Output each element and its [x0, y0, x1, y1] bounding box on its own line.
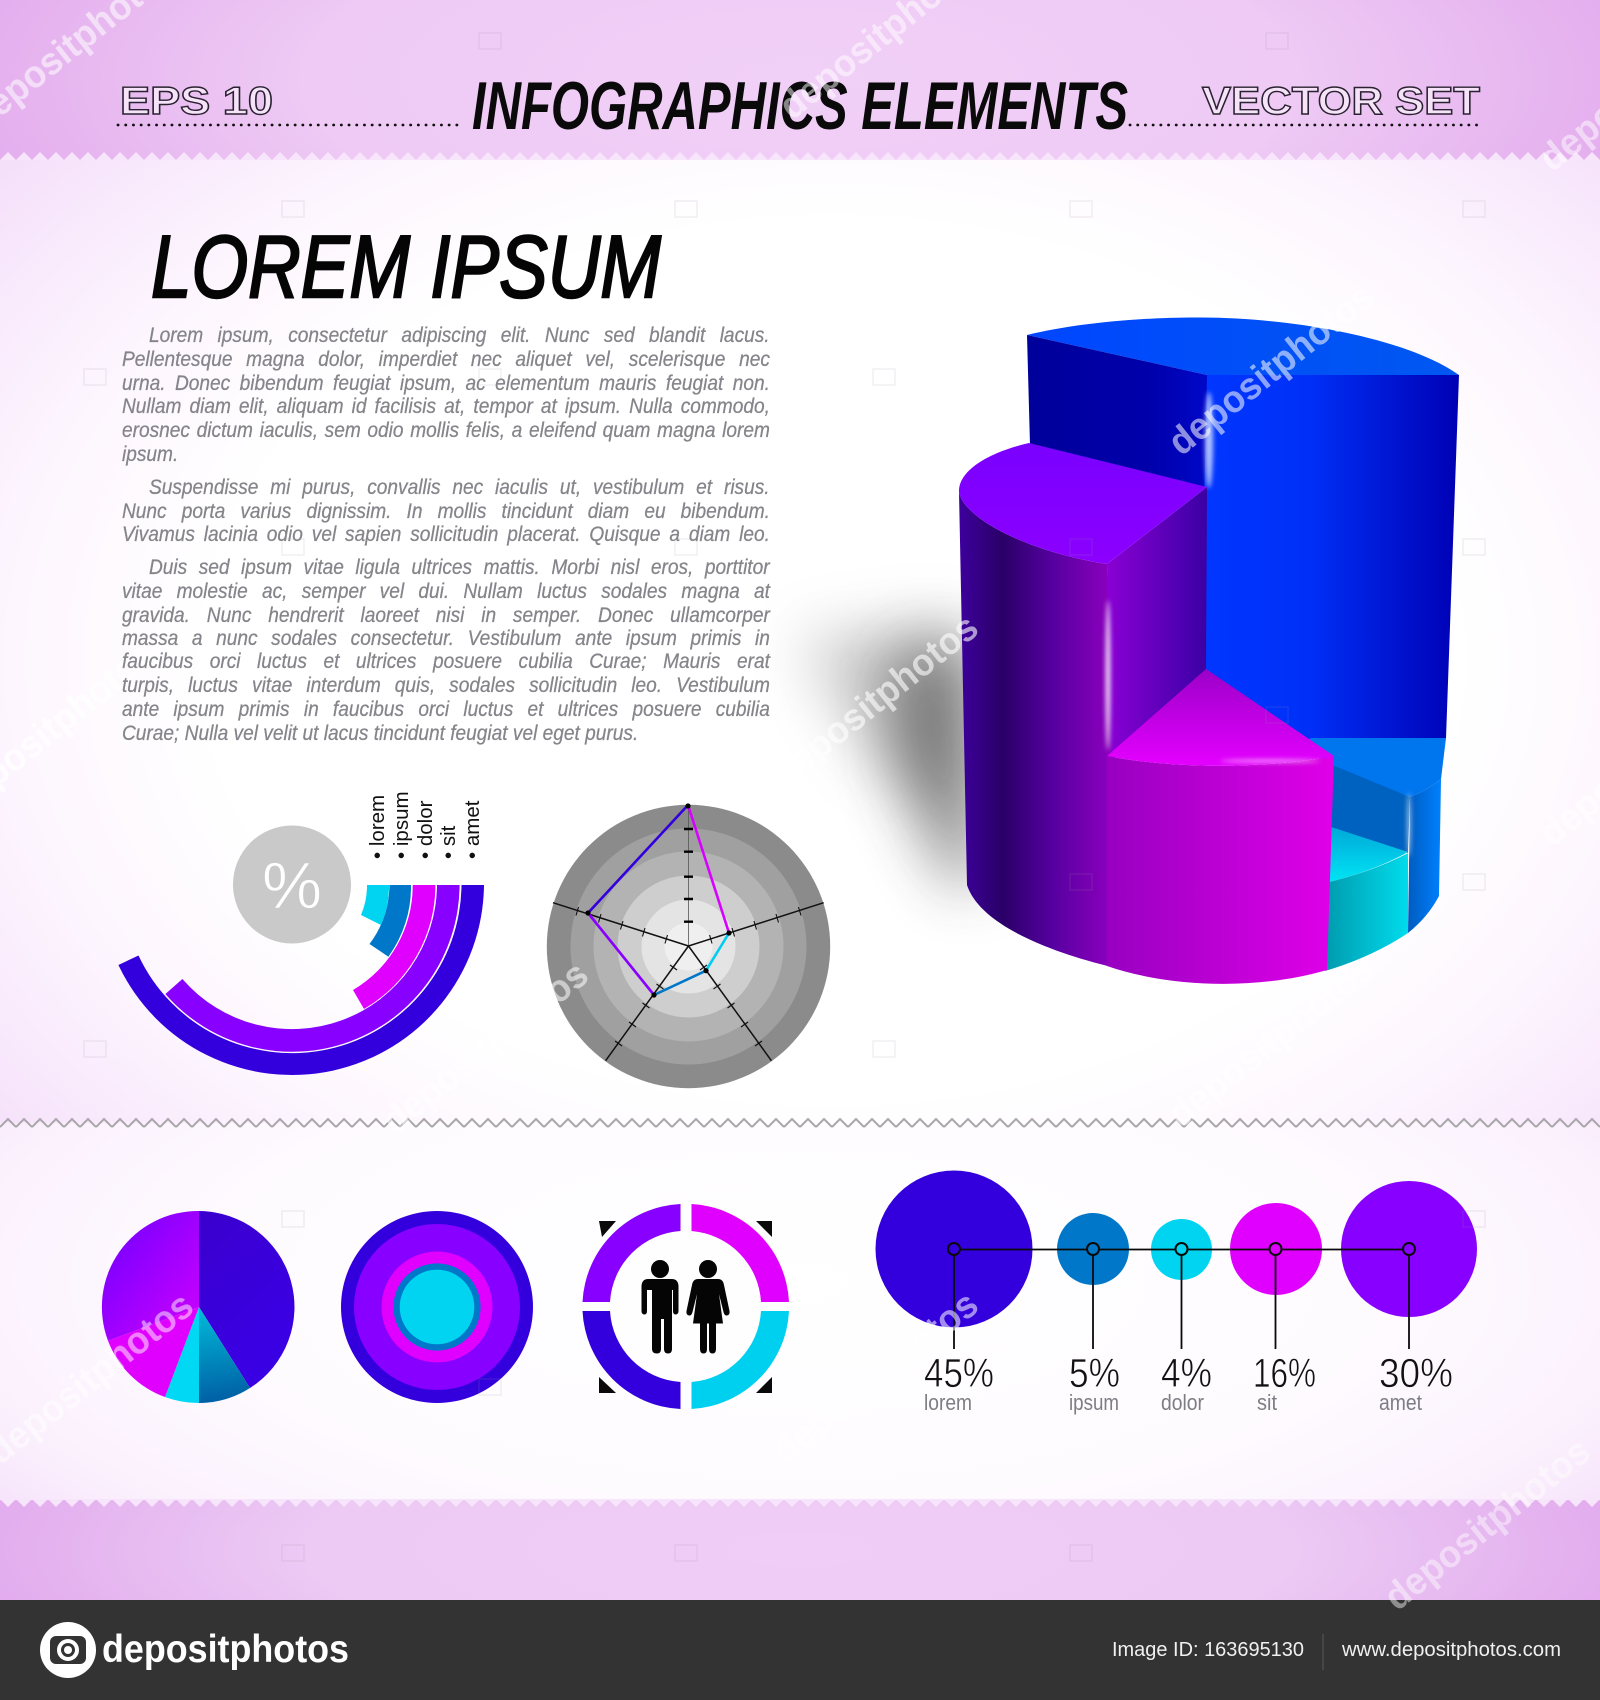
category labels: sit [1257, 1390, 1277, 1415]
cylinder cast shadow [800, 620, 980, 890]
purple slice outer wall [959, 492, 1115, 967]
body text: Duis sed ipsum vitae ligula ultrices mattis. Morbi nisl eros, porttitor [149, 556, 770, 579]
category labels: amet [1379, 1390, 1422, 1415]
specular highlights [1106, 392, 1411, 857]
header zigzag edge [0, 152, 1600, 160]
blue slice inner wall [1027, 335, 1207, 490]
arc: lorem [118, 885, 484, 1075]
body text: Curae; Nulla vel velit ut lacus tincidunt feugiat vel eget purus. [122, 722, 638, 745]
value labels: 30% [1379, 1350, 1453, 1396]
arc: sit [370, 885, 411, 957]
footer logo wordmark: depositphotos [102, 1628, 349, 1671]
purple slice inner wall [1107, 487, 1207, 757]
body text: ante ipsum primis in faucibus orci luctus et ultrices posuere cubilia [122, 698, 770, 721]
radial bar chart [118, 791, 484, 1075]
body text: gravida. Nunc hendrerit laoreet nisi in semper. Donec ullamcorper [122, 604, 770, 627]
percent badge [233, 826, 351, 944]
connector knobs [948, 1243, 1415, 1255]
watermarks: depositphotos [1161, 947, 1382, 1136]
category labels: dolor [1161, 1390, 1204, 1415]
section heading: LOREM IPSUM [151, 217, 662, 316]
magenta slice top face [1107, 669, 1334, 766]
value labels: 45% [924, 1350, 994, 1396]
watermarks: depositphotos [1161, 275, 1382, 464]
bubbles [876, 1170, 1477, 1328]
percent badge: % [262, 848, 322, 922]
body text: Suspendisse mi purus, convallis nec iaculis ut, vestibulum et risus. [149, 476, 770, 499]
footer band zigzag edge [0, 1499, 1600, 1507]
value labels: 5% [1069, 1350, 1120, 1396]
arc: amet [361, 885, 389, 925]
ring segment top left [582, 1204, 680, 1302]
header label: EPS 10: EPS 10 [120, 80, 273, 123]
rotated legend: • amet [461, 800, 484, 859]
light blue slice top face [1300, 738, 1446, 797]
arc: dolor [353, 885, 435, 1009]
light blue slice outer wall [1408, 779, 1441, 933]
cyan slice outer wall [1325, 853, 1408, 971]
footer website: www.depositphotos.com [1341, 1639, 1561, 1661]
light blue slice inner wall [1325, 762, 1410, 853]
concentric rings chart [341, 1211, 533, 1403]
3D stepped pie cylinder [800, 317, 1459, 984]
radar chart [547, 803, 830, 1088]
main title: INFOGRAPHICS ELEMENTS [472, 68, 1128, 144]
body text: Lorem ipsum, consectetur adipiscing elit. Nunc sed blandit lacus. [149, 324, 770, 347]
body text: turpis, luctus vitae interdum quis, sodales sollicitudin leo. Vestibulum [122, 674, 770, 697]
pie chart [102, 1211, 294, 1403]
body text: Pellentesque magna dolor, imperdiet nec aliquet vel, scelerisque nec [122, 348, 770, 371]
value labels [924, 1350, 1453, 1396]
icon: man [642, 1260, 678, 1354]
category labels [924, 1390, 1422, 1415]
magenta slice outer wall [1107, 756, 1334, 984]
body text: massa a nunc sodales consectetur. Vestibulum ante ipsum primis in [122, 627, 770, 650]
footer image id: Image ID: 163695130 [1112, 1639, 1304, 1661]
purple slice top face [959, 443, 1207, 564]
rotated legend: • dolor [414, 800, 437, 859]
rotated legend: • lorem [366, 795, 389, 859]
value labels: 16% [1253, 1350, 1316, 1396]
section divider [0, 1116, 1600, 1130]
rotated legend: • ipsum [390, 791, 413, 859]
header dotted rule left [118, 124, 462, 126]
cyan slice top face [1325, 825, 1408, 883]
body text: faucibus orci luctus et ultrices posuere cubilia Curae; Mauris erat [122, 650, 770, 673]
segmented ring with people icon [582, 1204, 789, 1409]
rotated legend: • sit [437, 825, 460, 859]
body text: Vivamus lacinia odio vel sapien sollicitudin placerat. Quisque a diam leo. [122, 523, 770, 546]
blue slice outer wall [1200, 375, 1459, 745]
watermark camera marks [84, 33, 1485, 1561]
value labels: 4% [1161, 1350, 1212, 1396]
ring segment bottom right [692, 1311, 789, 1409]
arc: ipsum [165, 885, 460, 1052]
body text: Nunc porta varius dignissim. In mollis tincidunt diam eu bibendum. [122, 500, 770, 523]
body text: vitae molestie ac, semper vel dui. Nullam luctus sodales magna at [122, 580, 770, 603]
footer logo badge [40, 1622, 96, 1678]
header label: VECTOR SET: VECTOR SET [1202, 80, 1480, 123]
icon: woman [686, 1260, 730, 1354]
watermarks: depositphotos [765, 606, 986, 795]
watermarks: depositphotos [765, 1283, 986, 1472]
body text: ipsum. [122, 443, 178, 466]
category labels: ipsum [1069, 1390, 1119, 1415]
rotated legend [366, 791, 484, 859]
corner markers [599, 1221, 772, 1393]
blue slice top face [1027, 317, 1459, 375]
bubble chart [876, 1170, 1477, 1415]
header dotted rule right [1130, 124, 1480, 126]
watermarks: depositphotos [375, 953, 596, 1142]
body text: urna. Donec bibendum feugiat ipsum, ac elementum mauris feugiat non. [122, 372, 770, 395]
body text: erosnec dictum iaculis, sem odio mollis felis, a eleifend quam magna lorem [122, 419, 770, 442]
ring segment bottom left [582, 1311, 680, 1409]
body text: Nullam diam elit, aliquam id facilisis at, tempor at ipsum. Nulla commodo, [122, 395, 770, 418]
radar data polygon [588, 805, 729, 995]
connector lines [954, 1249, 1409, 1349]
category labels: lorem [924, 1390, 972, 1415]
ring segment top right [692, 1204, 789, 1302]
